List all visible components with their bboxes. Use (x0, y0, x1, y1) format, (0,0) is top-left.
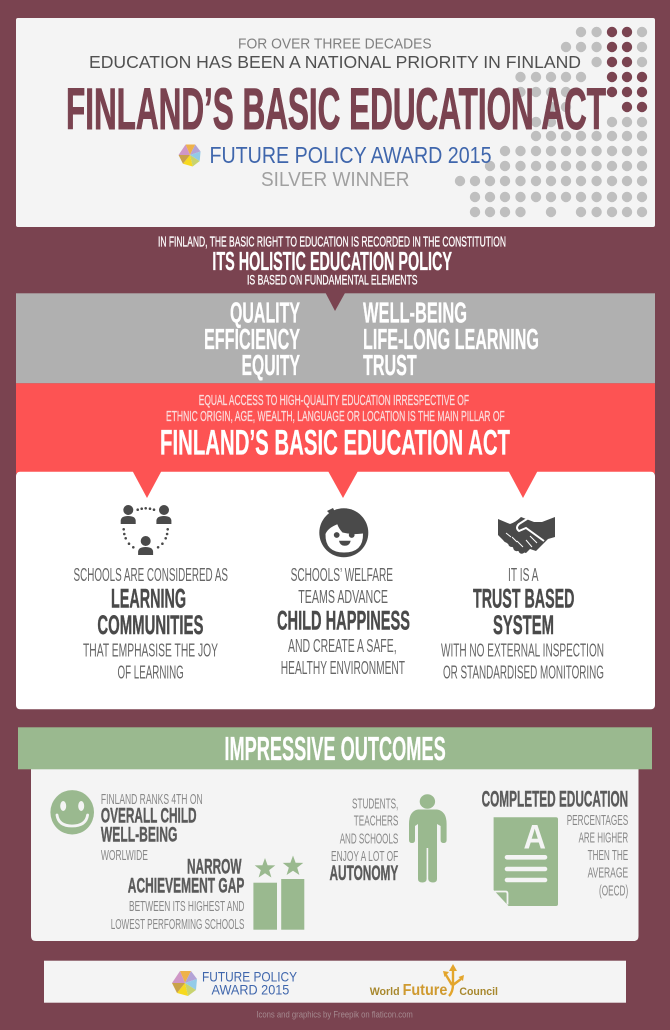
text block: achievement gap (111, 855, 244, 933)
icon: handshake (498, 517, 555, 554)
panel: header (16, 18, 655, 227)
icon: child face (319, 508, 368, 557)
text block: learning communities: LEARNING (111, 583, 186, 613)
elements right column: LIFE-LONG LEARNING (363, 324, 539, 356)
text block: autonomy: TEACHERS (354, 813, 398, 830)
elements right column: TRUST (363, 350, 417, 382)
elements right column: WELL-BEING (363, 298, 467, 330)
text block: holistic policy (158, 234, 506, 287)
award wordmark: AWARD 2015 (212, 982, 289, 998)
text block: child well-being: WELL-BEING (101, 824, 177, 847)
award name: FUTURE POLICY AWARD 2015 (210, 142, 492, 168)
text block: trust based system (441, 564, 604, 683)
text block: achievement gap: NARROW (187, 855, 242, 878)
council wordmark: Future (403, 982, 447, 999)
panel: outcomes body (31, 769, 638, 941)
panel: three principles (16, 471, 655, 709)
pillar intro text: EQUAL ACCESS TO HIGH-QUALITY EDUCATION IRRESPECTIVE OF (199, 393, 469, 409)
icon: award logo small (172, 971, 197, 996)
text block: autonomy (330, 795, 398, 885)
text block: child happiness (277, 564, 410, 678)
pillar intro text (166, 393, 505, 425)
icon: smiley (50, 790, 94, 834)
text block: learning communities (74, 564, 228, 683)
council wordmark: World (370, 986, 400, 998)
text block: child well-being: OVERALL CHILD (101, 805, 197, 828)
icon: graded document (494, 817, 558, 906)
council wordmark (370, 982, 498, 999)
text block: learning communities: COMMUNITIES (97, 610, 203, 640)
text block: child happiness: HEALTHY ENVIRONMENT (281, 657, 405, 678)
award rank: SILVER WINNER (261, 169, 410, 191)
icon: graded document: A (524, 818, 546, 856)
text block: holistic policy: IS BASED ON FUNDAMENTAL ELEMENTS (247, 272, 418, 287)
icon: award logo (179, 144, 201, 166)
text block: achievement gap: LOWEST PERFORMING SCHOOLS (111, 916, 244, 933)
text block: child happiness: TEAMS ADVANCE (298, 586, 388, 607)
header intro line: FOR OVER THREE DECADES (238, 36, 432, 52)
heading: impressive outcomes (18, 727, 652, 769)
text block: child well-being: WORLWIDE (101, 847, 148, 864)
panel: main pillar (16, 383, 655, 473)
elements left column: EFFICIENCY (204, 324, 300, 356)
text block: child happiness: SCHOOLS’ WELFARE (291, 564, 393, 585)
heading: impressive outcomes: IMPRESSIVE OUTCOMES (224, 730, 446, 767)
text block: child happiness: AND CREATE A SAFE, (288, 635, 397, 656)
panel: footer logos (44, 961, 626, 1003)
text block: completed education: (OECD) (599, 882, 628, 899)
text block: achievement gap: ACHIEVEMENT GAP (128, 875, 244, 898)
panel: fundamental elements (16, 293, 655, 383)
text block: child well-being: FINLAND RANKS 4TH ON (101, 791, 203, 808)
elements right column (363, 298, 539, 382)
text block: autonomy: AND SCHOOLS (340, 830, 398, 847)
text block: trust based system: IT IS A (508, 564, 539, 585)
text block: completed education: ARE HIGHER (579, 829, 628, 846)
arrow: pointer into elements panel (326, 293, 345, 311)
arrow: pointer to trust based system (508, 471, 538, 498)
icon: council tree arrow (443, 964, 464, 996)
elements left column: QUALITY (230, 298, 300, 330)
text block: achievement gap: BETWEEN ITS HIGHEST AND (129, 898, 244, 915)
elements left column (204, 298, 300, 382)
text block: autonomy: STUDENTS, (352, 795, 398, 812)
elements left column: EQUITY (242, 350, 300, 382)
text block: completed education: AVERAGE (588, 865, 628, 882)
icon: person (409, 794, 447, 882)
text block: autonomy: ENJOY A LOT OF (331, 848, 398, 865)
text block: holistic policy: ITS HOLISTIC EDUCATION POLICY (212, 246, 452, 276)
arrow: pointer to child happiness (328, 471, 358, 498)
text block: child well-being (101, 791, 203, 864)
text block: learning communities: OF LEARNING (118, 662, 184, 683)
text block: child happiness: CHILD HAPPINESS (277, 605, 410, 635)
text block: learning communities: SCHOOLS ARE CONSIDERED AS (74, 564, 228, 585)
arrow: pointer to learning communities (132, 471, 162, 498)
text block: autonomy: AUTONOMY (330, 862, 398, 885)
text block: learning communities: THAT EMPHASISE THE JOY (83, 640, 218, 661)
council wordmark: Council (459, 986, 498, 998)
icon: bars and stars (253, 856, 304, 930)
decorative dot map of Finland (460, 32, 642, 212)
credit line: Icons and graphics by Freepik on flaticon.com (256, 1010, 413, 1020)
text block: completed education: THEN THE (588, 847, 628, 864)
award wordmark: FUTURE POLICY (202, 969, 298, 985)
text block: trust based system: TRUST BASED (473, 583, 574, 613)
text block: completed education (482, 787, 628, 899)
text block: trust based system: SYSTEM (493, 610, 554, 640)
icon: people circle (121, 505, 171, 555)
award wordmark (202, 969, 298, 998)
header subtitle: EDUCATION HAS BEEN A NATIONAL PRIORITY IN FINLAND (89, 52, 581, 72)
